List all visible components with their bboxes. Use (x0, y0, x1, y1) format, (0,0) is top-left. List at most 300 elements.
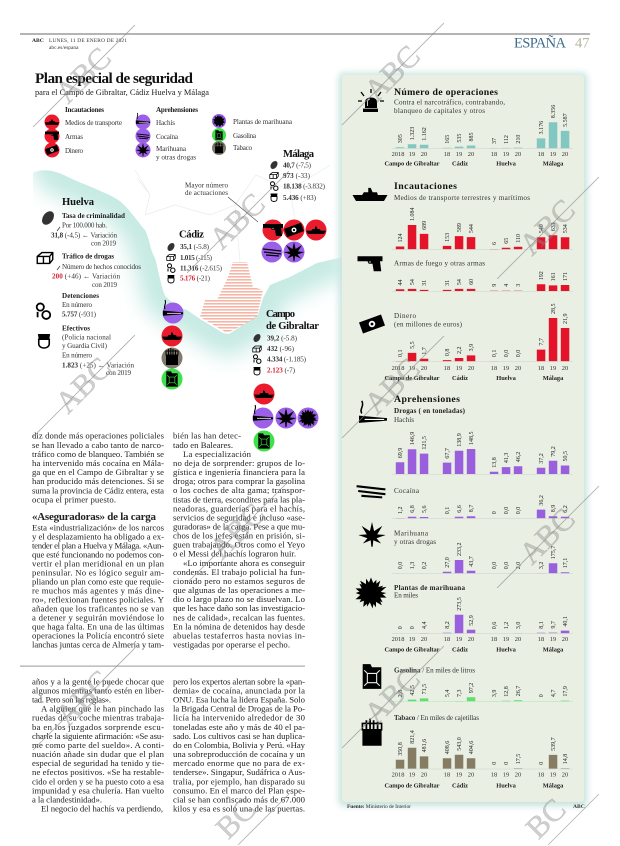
watermarks: ABC (357, 351, 427, 421)
article text: lower right column (173, 676, 306, 814)
icon: siren (358, 89, 384, 112)
bar chart: cocaina: 0,0 (516, 507, 522, 514)
bar chart: armas: 54 (410, 279, 416, 285)
icon: tobacco (362, 719, 382, 746)
bar chart: armas: 3 (516, 284, 522, 287)
label: dinero (394, 312, 463, 329)
bar chart: gasolina: 12,8 (504, 686, 510, 697)
circles: Málaga (262, 220, 326, 262)
label: marihuana (394, 530, 436, 546)
credit: ABC (573, 804, 585, 810)
bar chart: operaciones: 19 (456, 151, 462, 158)
bar chart: gasolina (392, 683, 573, 702)
article text: lower right column: tenderse». Singapur, Sudáfrica o Aus- (173, 767, 305, 777)
Campo de Gibraltar block: Campo (266, 309, 295, 320)
Huelva block: 1.823 (+25) ← Variación (62, 361, 134, 369)
heading: aprehensiones: Aprehensiones (394, 394, 460, 405)
bar chart: plantas: 0 (410, 626, 416, 629)
bar chart: plantas: 52,9 (469, 615, 475, 626)
bar chart: armas: 192 (539, 271, 545, 280)
bar chart: tabaco: 20 (562, 772, 568, 779)
bar chart: marihuana: 1,3 (410, 562, 416, 569)
watermarks: ABC (357, 661, 427, 731)
bar chart: operaciones: 19 (503, 151, 509, 158)
article text: upper left column: ga que en el Campo de Gibraltar y se (32, 467, 164, 477)
Huelva block: En número (62, 352, 92, 360)
bar chart: tabaco: 20 (468, 772, 474, 779)
bar chart: gasolina: 97,2 (469, 683, 475, 693)
bar chart: plantas: 8,1 (539, 621, 545, 629)
circles: Cádiz (162, 300, 184, 390)
bar chart: armas: 4 (504, 284, 510, 287)
Cádiz block: Cádiz (179, 229, 204, 240)
bar chart: plantas: 8,2 (445, 621, 451, 629)
Málaga block: 18.138 (-3.832) (283, 183, 326, 191)
bar chart: dinero: 19 (550, 365, 556, 372)
bar chart: gasolina: 4,7 (551, 690, 557, 697)
map background (33, 165, 343, 334)
bar chart: medios de transporte: 534 (563, 224, 569, 233)
bar chart: tabaco: 19 (456, 772, 462, 779)
article text: upper left column: pliando un plan como este que requie- (32, 576, 164, 586)
Huelva block: En número (62, 301, 92, 309)
legend labels: Tabaco (233, 144, 252, 152)
bar chart: dinero: 0,0 (504, 350, 510, 357)
bar chart: tabaco: 821,4 (410, 730, 416, 744)
bar chart: operaciones: 112 (504, 135, 510, 144)
Campo de Gibraltar block: 2.123 (-7) (267, 366, 296, 374)
bar chart: tabaco: 18 (538, 772, 544, 779)
bar chart: plantas: 0,6 (492, 622, 498, 629)
legend icon: hachis (136, 113, 150, 130)
watermarks: ABC (512, 501, 582, 571)
bar chart: marihuana: 0,0 (504, 562, 510, 569)
bar chart: marihuana: 3,2 (539, 562, 545, 569)
label: plantas de marihuana (394, 584, 465, 600)
article text: upper left column: han producido más detenciones. Si se (32, 476, 164, 486)
bar chart: dinero: 19 (409, 365, 415, 372)
bar chart: tabaco: 2018 (392, 772, 404, 779)
bar chart: dinero: 18 (444, 365, 450, 372)
bar chart: plantas: 20 (562, 636, 568, 643)
legend labels: Gasolina (233, 132, 257, 140)
article text: upper left column: lanchas juntas cerca de Almería y tam- (32, 640, 164, 650)
article text: upper left column: se han llevado a cabo tanto de narco- (32, 440, 164, 450)
article text: upper right column: vestigadas por operarse el pecho. (173, 640, 290, 650)
bar chart: tabaco: 20 (421, 772, 427, 779)
article text: upper right column: chos de los jefes están en prisión, si- (173, 531, 305, 541)
article text: lower right column: la Brigada Central de Drogas de la Po- (173, 704, 305, 714)
bar chart: tabaco: Málaga (543, 783, 564, 790)
bar chart: armas: 31 (445, 280, 451, 286)
bar chart: dinero: 3,9 (469, 344, 475, 351)
article text: upper left column: que esté funcionando no podemos con- (32, 549, 164, 559)
bar chart: medios de transporte: 540 (539, 224, 545, 233)
Cádiz block: 1.015 (-115) (180, 254, 213, 262)
bar chart: armas: 60 (469, 279, 475, 285)
bar chart: armas (392, 271, 573, 292)
bar chart: plantas: 19 (503, 636, 509, 643)
description: drogas: Drogas ( en toneladas) (394, 407, 466, 415)
article text: upper right column: La especialización (183, 449, 252, 459)
legend labels: Cocaína (156, 133, 179, 141)
column rule (20, 666, 305, 667)
bar chart: tabaco: 408,6 (445, 741, 451, 754)
bar chart: cocaina: 0,1 (445, 507, 451, 514)
bar chart: tabaco: 0 (539, 762, 545, 765)
bar chart: operaciones: 18 (538, 151, 544, 158)
article text: lower right column: cial se han confiscado más de 67.000 (173, 794, 306, 804)
bar chart: marihuana: 43,7 (469, 556, 475, 567)
icon: cocaine (357, 486, 385, 497)
label: tabaco: Tabaco / En miles de cajetillas (394, 714, 479, 722)
article text: lower left column: tad. Pero son las reglas». (32, 694, 111, 704)
description: operaciones: blanqueo de capitales y otros (394, 107, 485, 115)
bar chart: dinero: Cádiz (452, 375, 468, 382)
article text: upper left column: añaden que los traficantes no se van (32, 603, 165, 613)
article text: lower right column: demia» de cocaína, anunciada por la (173, 685, 305, 695)
article text: lower left column: cido el orden y se ha puesto coto a esa (32, 776, 164, 786)
article text: upper left column: ocupa el primer puesto. (32, 494, 116, 504)
article text: upper right column: bién las han detec- (173, 431, 241, 441)
Huelva block: (Policía nacional (62, 333, 111, 341)
bar chart: plantas: 18 (444, 636, 450, 643)
Málaga block: Málaga (283, 149, 315, 160)
Málaga block: 40,7 (-7,5) (283, 162, 312, 170)
watermarks: ABC (202, 496, 272, 566)
article text: upper left column: a detener y seguirán moviéndose lo (32, 612, 165, 622)
title: Plan especial de seguridad (35, 70, 194, 87)
bar chart: dinero: 18 (491, 365, 497, 372)
bar chart: dinero: 7,7 (539, 338, 545, 346)
bar chart: plantas: 18 (491, 636, 497, 643)
bar chart: dinero: 2018 (392, 365, 404, 372)
bar chart: hachis: 13,8 (492, 457, 498, 468)
article text: lower left column: me como parte del sueldo». A conti- (32, 740, 164, 750)
bar chart: plantas: 20 (421, 636, 427, 643)
article text: lower left column: impunidad y esa chulería. Han vuelto (32, 785, 165, 795)
bar chart: marihuana: 0,0 (398, 562, 404, 569)
article text: upper right column: nes de calidad», recalcan las fuentes. (173, 612, 305, 622)
bar chart: operaciones: 535 (457, 134, 463, 143)
bar chart: medios de transporte: 124 (398, 234, 404, 242)
icon: efectivos (38, 334, 50, 348)
bar chart: plantas: 4,4 (422, 622, 428, 629)
bar chart: plantas: 19 (550, 636, 556, 643)
bar chart: dinero: 19 (503, 365, 509, 372)
article text: lower right column: toneladas este año y más de 40 el pa- (173, 722, 305, 732)
Huelva block: Tasa de criminalidad (62, 212, 125, 220)
Campo de Gibraltar block: de Gibraltar (266, 321, 319, 332)
legend icon: armas (44, 128, 60, 144)
label: gasolina: Gasolina / En miles de litros (394, 667, 475, 675)
bar chart: tabaco: 20 (515, 772, 521, 779)
bar chart: plantas: 40,1 (563, 616, 569, 627)
bar chart: hachis: 69,9 (398, 448, 404, 458)
bar chart: marihuana: 175,7 (551, 546, 557, 559)
bar chart: dinero: 19 (456, 365, 462, 372)
watermarks: ABC (512, 192, 582, 262)
bar chart: plantas: 273,5 (457, 597, 463, 611)
bar chart: tabaco (384, 730, 573, 790)
article text: lower right column: do en Colombia, Bolivia y Perú. «Hay (173, 740, 306, 750)
description: medios de transporte: Medios de transporte terrestres y marítimos (394, 194, 530, 202)
article text: upper right column: condenas. El trabajo policial ha fun- (173, 567, 305, 577)
bar chart: operaciones: 18 (444, 151, 450, 158)
page number: 47 (575, 36, 590, 52)
bar chart: dinero: Huelva (496, 375, 517, 382)
legend icon: tabaco (212, 141, 226, 155)
article text: upper right column: servicios de seguridad e incluso «ase- (173, 512, 305, 522)
bar chart: gasolina: 7,3 (457, 690, 463, 697)
Huelva block: Huelva (62, 197, 95, 208)
description: operaciones: Contra el narcotráfico, contrabando, (394, 98, 505, 106)
article text: upper right column: que algunas de las operaciones a me- (173, 585, 305, 595)
article text: upper right column: cionado pero no estamos seguros de (173, 576, 305, 586)
bar chart: operaciones: 2018 (392, 151, 404, 158)
legend icon: dinero (44, 142, 60, 158)
bar chart: operaciones: 8.356 (551, 105, 557, 118)
bar chart: tabaco: 481,6 (422, 739, 428, 752)
article text: lower left column: A alguien que le han pinchado las (41, 704, 165, 714)
article text: upper right column: guen trabajando. Otros como el Yeyo (173, 540, 306, 550)
article text: upper right column: tistas de tierra, escondites para las pla- (173, 494, 305, 504)
article text: lower right column: mercado enorme que no para de ex- (173, 758, 305, 768)
Campo de Gibraltar block (252, 309, 319, 452)
bar chart: cocaina: 0,0 (504, 507, 510, 514)
Cádiz block (162, 229, 223, 390)
article text: lower right column: kilos y esa es solo una de las puertas. (173, 804, 305, 814)
Huelva block: 5.757 (-931) (62, 311, 97, 319)
bar chart: dinero: 1,7 (422, 347, 428, 355)
bar chart: plantas: 3,0 (516, 622, 522, 629)
article text: upper left column: peninsular. No es lógico seguir am- (32, 567, 164, 577)
bar chart: operaciones: Cádiz (452, 160, 468, 168)
icon: leaf (358, 522, 386, 547)
bar chart: tabaco: 0 (504, 762, 510, 765)
bar chart: plantas: 9,7 (551, 621, 557, 629)
legend (44, 106, 293, 162)
Huelva block: Número de hechos conocidos (62, 263, 141, 271)
bar chart: medios de transporte: 589 (457, 223, 463, 232)
legend icon: plantas (212, 114, 226, 128)
bar chart: medios de transporte (392, 208, 573, 250)
legend labels: Plantas de marihuana (233, 118, 293, 126)
bar chart: medios de transporte: 689 (422, 221, 428, 230)
heading: incautaciones: Incautaciones (394, 181, 457, 192)
icon: money (359, 315, 385, 333)
bar chart: plantas: 2018 (392, 636, 404, 643)
bar chart: hachis: 41,3 (504, 453, 510, 463)
Cádiz block: 11.316 (-2.615) (180, 264, 223, 272)
icon: pistol (358, 256, 382, 271)
article text: lower left column: ruedas de su coche mientras trabaja- (32, 713, 164, 723)
article text: upper right column: droga; otros para comprar la gasolina (173, 476, 305, 486)
bar chart: dinero: 18 (538, 365, 544, 372)
bar chart: dinero: 28,5 (551, 304, 557, 314)
Huelva block (37, 197, 141, 377)
bar chart: hachis: 46,2 (516, 452, 522, 462)
article text: lower left column: años y a la gente le puede chocar que (32, 676, 164, 686)
bar chart: medios de transporte: 544 (469, 224, 475, 233)
bar chart: gasolina: 17,9 (563, 686, 569, 697)
watermarks: ABC (48, 350, 118, 420)
article text: lower left column: ne efectos positivos. «Se ha restable- (32, 767, 164, 777)
article text: upper right column: «Lo importante ahora es conseguir (183, 558, 305, 568)
bar chart: plantas (384, 597, 573, 654)
bar chart: dinero: 2,2 (457, 346, 463, 354)
article text: lower right column: consumo. En el marco del Plan espe- (173, 785, 305, 795)
bar chart: cocaina: 6,2 (563, 505, 569, 513)
bar chart: plantas: 1,2 (504, 622, 510, 629)
article text: lower left column: a la clandestinidad». (32, 794, 102, 804)
article text: lower right column: tralia, por ejemplo, han disparado su (173, 776, 306, 786)
bar chart: medios de transporte: 631 (551, 222, 557, 231)
bar chart: dinero: Campo de Gibraltar (384, 375, 440, 382)
header: web address: abc.es/espana (49, 45, 79, 51)
label: armas: Armas de fuego y otras armas (394, 260, 485, 268)
bar chart: armas: 171 (563, 272, 569, 281)
article text: upper left column: que haga falta. En una de las últimas (32, 621, 165, 631)
bar chart: hachis: 121,5 (422, 436, 428, 450)
legend labels: Marihuana (156, 145, 187, 153)
bar chart: gasolina: 42,5 (410, 685, 416, 696)
Huelva block: 31,8 (-4,5) ← Variación (51, 232, 117, 240)
bar chart: cocaina: 8,9 (551, 505, 557, 512)
bar chart: marihuana: 0,0 (492, 562, 498, 569)
bar chart: hachis: 67,7 (445, 448, 451, 459)
bar chart: marihuana: 233,2 (457, 542, 463, 556)
legend labels (65, 118, 293, 162)
bar chart: gasolina: 26,7 (516, 686, 522, 696)
source note: Fuente: Ministerio de Interior (347, 804, 411, 810)
icon: detenciones (37, 303, 50, 319)
bar chart: marihuana: 0,2 (422, 562, 428, 569)
legend labels: Armas (65, 133, 83, 141)
bar chart: operaciones: 18 (491, 151, 497, 158)
bar chart: hachis: 79,2 (551, 446, 557, 457)
label: dinero: (en millones de euros) (394, 321, 463, 329)
bar chart: dinero: Málaga (543, 375, 564, 382)
bar chart: operaciones: 1.323 (410, 127, 416, 140)
bar chart: operaciones: 3.176 (539, 121, 545, 134)
Huelva block: y Guardia Civil) (62, 342, 108, 350)
bar chart: plantas: Huelva (496, 646, 517, 654)
watermarks: BC (209, 791, 263, 845)
Málaga block: 5.436 (+83) (283, 194, 317, 202)
bar chart: operaciones: 5.587 (563, 113, 569, 127)
watermarks: ABC (48, 40, 118, 110)
legend icon: marihuana (136, 142, 150, 158)
Huelva block: 200 (+46) ← Variación (52, 273, 120, 281)
bar chart: armas: 161 (551, 272, 557, 281)
Cádiz block: 5.176 (-21) (180, 275, 211, 283)
bar chart: tabaco: Cádiz (452, 783, 468, 790)
bar chart: cocaina: 0 (492, 511, 498, 514)
bar chart: plantas: Cádiz (452, 646, 468, 654)
bar chart: marihuana: 2,0 (516, 562, 522, 569)
article text: upper right column: tado en Baleares. (173, 440, 233, 450)
bar chart: dinero (384, 304, 573, 382)
Málaga block: 973 (-33) (283, 172, 311, 180)
Huelva block: con 2019 (91, 240, 116, 248)
bar chart: tabaco: 14,8 (563, 754, 569, 764)
icon: joint (359, 401, 387, 423)
bar chart: tabaco: 18 (491, 772, 497, 779)
bar chart: operaciones: 885 (469, 132, 475, 142)
legend labels: Dinero (65, 147, 83, 155)
heading: numero de operaciones: Número de operaciones (394, 87, 498, 98)
description: drogas: Hachís (394, 416, 414, 424)
bar chart: tabaco: 19 (409, 772, 415, 779)
bar chart: armas: 44 (398, 280, 404, 286)
bar chart: operaciones: 20 (421, 151, 427, 158)
legend icon: gasolina (212, 128, 226, 142)
bar chart: cocaina: 6,8 (410, 505, 416, 513)
bar chart: marihuana (392, 542, 573, 574)
bar chart: tabaco: 19 (503, 772, 509, 779)
bar chart: dinero: 5,5 (410, 341, 416, 349)
Huelva block: con 2019 (92, 281, 117, 289)
bar chart: armas: 9 (492, 284, 498, 287)
bar chart: hachis: 146,9 (410, 432, 416, 445)
Cádiz block: 35,1 (-5.8) (180, 243, 210, 251)
legend: Incautaciones (65, 106, 104, 114)
bar chart: operaciones: Campo de Gibraltar (384, 160, 440, 168)
bar chart: armas: 54 (457, 279, 463, 285)
bar chart: operaciones: 165 (445, 135, 451, 144)
legend: Aprehensiones (156, 106, 198, 114)
bar chart: cocaina: 36,2 (539, 495, 545, 506)
bar chart: medios de transporte: 6 (492, 242, 498, 245)
bar chart: medios de transporte: 1.084 (410, 208, 416, 221)
header: ABC and date: ABC (32, 38, 44, 44)
header: date line: LUNES, 11 DE ENERO DE 2021 (49, 38, 127, 44)
Huelva block: Detenciones (62, 292, 99, 300)
bar chart: operaciones: 20 (515, 151, 521, 158)
bar chart: gasolina: 71,5 (422, 684, 428, 694)
Campo de Gibraltar block: 4.334 (-1.185) (267, 356, 307, 364)
bar chart: operaciones: Málaga (543, 160, 564, 168)
bar chart: plantas: Málaga (543, 646, 564, 654)
bar chart: cocaina: 1,2 (398, 506, 404, 514)
bar chart: dinero: 20 (468, 365, 474, 372)
bar chart: tabaco: Campo de Gibraltar (384, 783, 440, 790)
label: dinero: Dinero (394, 312, 416, 320)
bar chart: gasolina: 3,9 (492, 690, 498, 697)
legend labels: y otras drogas (156, 154, 196, 162)
bar chart: cocaina: 6,6 (457, 505, 463, 513)
article text: lower left column: ba en los juzgados sorprende escu- (32, 722, 164, 732)
watermarks: ABC (357, 38, 427, 108)
article text: lower right column: ONU. Esa lucha la lidera España. Solo (173, 694, 306, 704)
bar chart: dinero: 20 (421, 365, 427, 372)
page header (20, 33, 590, 52)
bar chart: tabaco: 19 (550, 772, 556, 779)
article text: lower left column: especial de seguridad ha tenido y tie- (32, 758, 164, 768)
bar chart: hachis (392, 432, 573, 475)
icon: criminalidad (40, 209, 56, 227)
bar chart: marihuana: 17,1 (563, 558, 569, 568)
bar chart: dinero: 0,0 (516, 350, 522, 357)
bar chart: dinero: 21,9 (563, 314, 569, 324)
bar chart: medios de transporte: 65 (504, 238, 510, 244)
bar chart: plantas: Campo de Gibraltar (384, 646, 440, 654)
article text: upper right column: En la nómina de detenidos hay desde (173, 621, 305, 631)
bar chart: hachis: 148,5 (469, 432, 475, 445)
article text: upper right column: abuelas testaferros hasta novias in- (173, 630, 305, 640)
bar chart: dinero: 0,1 (398, 350, 404, 357)
